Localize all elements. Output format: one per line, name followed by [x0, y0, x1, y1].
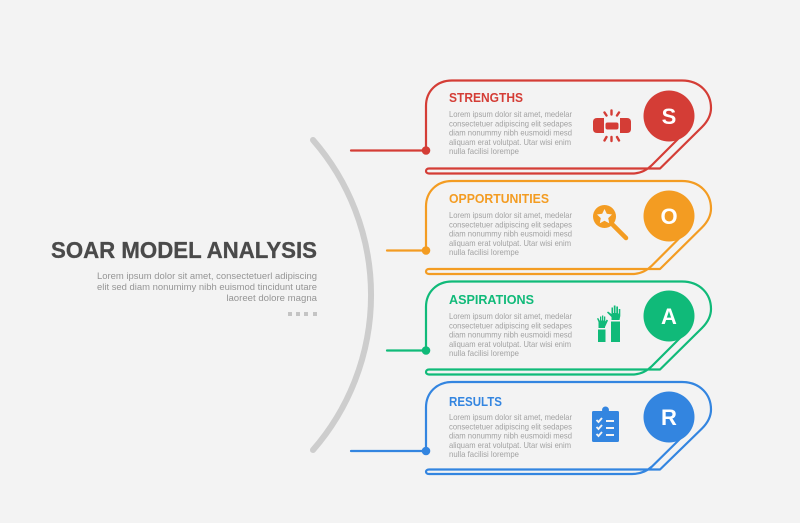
icon: magnifier with star: [593, 205, 626, 238]
badge R: [644, 392, 694, 442]
body text: aliquam erat volutpat. Utar wisi enim: [449, 138, 571, 147]
icon: raised hands: [597, 306, 620, 342]
body text: nulla facilisi lorempe: [449, 450, 519, 459]
body text: Lorem ipsum dolor sit amet, medelar: [449, 312, 572, 321]
body text: consectetuer adipiscing elit sedapes: [449, 220, 572, 229]
connector dot: [422, 146, 430, 155]
body text: [449, 110, 572, 156]
body text: Lorem ipsum dolor sit amet, medelar: [449, 110, 572, 119]
badge O: [644, 190, 694, 242]
outline: [387, 282, 711, 374]
panel: opportunities: [387, 181, 711, 274]
badge O: O: [660, 204, 678, 229]
body text: Lorem ipsum dolor sit amet, medelar: [449, 413, 572, 422]
body text: [449, 211, 572, 257]
body text: nulla facilisi lorempe: [449, 147, 519, 156]
body text: diam nonummy nibh eusmoidi mesd: [449, 230, 572, 239]
panel: results: [351, 382, 711, 474]
title block: [51, 237, 318, 316]
icon: broken bandage: [593, 110, 631, 141]
panel: strengths: [351, 80, 711, 174]
body text: [449, 312, 572, 358]
body text: diam nonummy nibh eusmoidi mesd: [449, 432, 572, 441]
connector dot: [422, 447, 430, 455]
body text: [449, 413, 572, 459]
body text: diam nonummy nibh eusmoidi mesd: [449, 129, 572, 138]
central arc: [313, 140, 371, 450]
dots: [288, 312, 317, 316]
heading: ASPIRATIONS: [449, 292, 534, 307]
body text: consectetuer adipiscing elit sedapes: [449, 422, 572, 431]
badge S: [644, 90, 694, 142]
connector dot: [422, 246, 430, 255]
outline: [351, 382, 711, 474]
subtitle text: Lorem ipsum dolor sit amet, consectetuerl adipiscing: [97, 271, 317, 282]
subtitle text: elit sed diam nonumimy nibh euismod tincidunt utare: [97, 282, 317, 293]
heading: RESULTS: [449, 394, 502, 409]
connector dot: [422, 346, 430, 355]
body text: aliquam erat volutpat. Utar wisi enim: [449, 340, 571, 349]
heading: STRENGTHS: [449, 90, 523, 105]
heading: OPPORTUNITIES: [449, 191, 549, 206]
badge A: [644, 290, 694, 342]
body text: aliquam erat volutpat. Utar wisi enim: [449, 239, 571, 248]
subtitle text: laoreet dolore magna: [226, 293, 318, 304]
body text: nulla facilisi lorempe: [449, 248, 519, 257]
badge A: A: [661, 304, 677, 329]
badge R: R: [661, 405, 677, 430]
panel: aspirations: [387, 282, 711, 374]
body text: Lorem ipsum dolor sit amet, medelar: [449, 211, 572, 220]
body text: consectetuer adipiscing elit sedapes: [449, 321, 572, 330]
badge S: S: [662, 104, 676, 129]
subtitle text: [97, 271, 318, 304]
title: SOAR MODEL ANALYSIS: [51, 237, 317, 263]
body text: diam nonummy nibh eusmoidi mesd: [449, 331, 572, 340]
outline: [387, 181, 711, 274]
outline: [351, 80, 711, 174]
body text: aliquam erat volutpat. Utar wisi enim: [449, 441, 571, 450]
icon: clipboard checklist: [592, 406, 619, 442]
body text: nulla facilisi lorempe: [449, 349, 519, 358]
body text: consectetuer adipiscing elit sedapes: [449, 119, 572, 128]
